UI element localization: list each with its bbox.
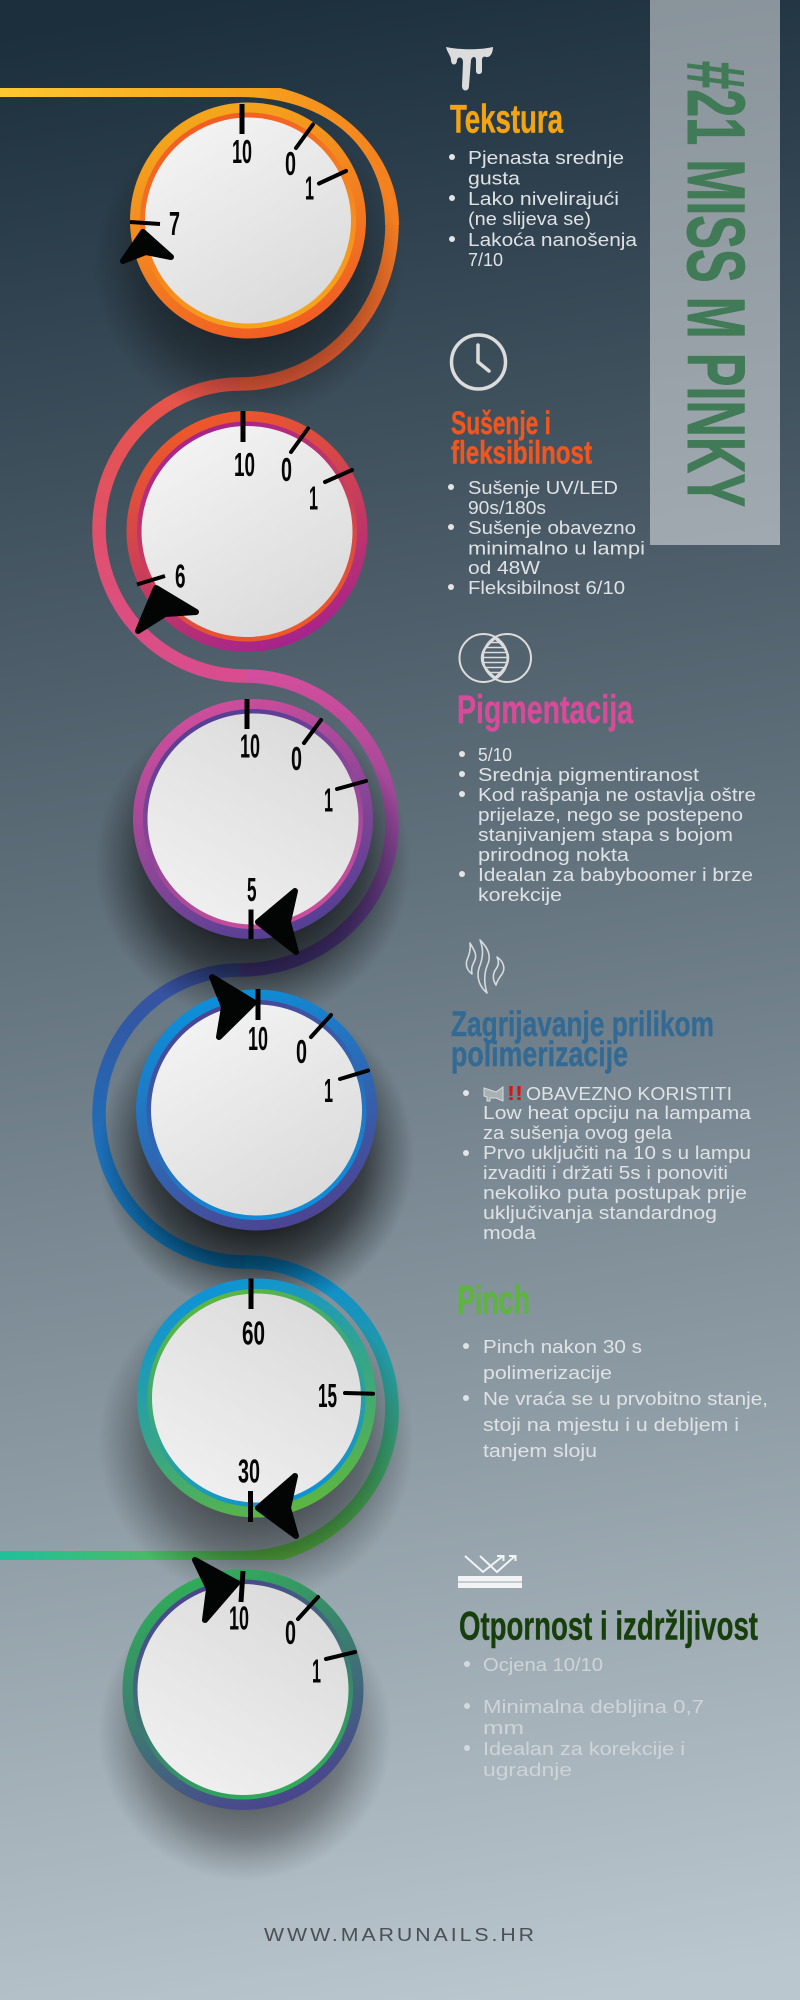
section: pigmentacija: prirodnog nokta	[478, 845, 630, 865]
section: pigmentacija: prijelaze, nego se postepeno	[478, 805, 743, 825]
section: zagrijavanje prilikom polimerizacije: uključivanja standardnog	[483, 1203, 717, 1223]
section: zagrijavanje prilikom polimerizacije: moda	[483, 1223, 537, 1243]
section: zagrijavanje prilikom polimerizacije: !!	[507, 1083, 523, 1105]
dial 1: tekstura	[123, 102, 366, 338]
section: tekstura: Lako nivelirajući	[468, 189, 619, 209]
section: zagrijavanje prilikom polimerizacije	[451, 1005, 752, 1243]
icon: overlapping circles	[460, 634, 531, 682]
section: susenje i fleksibilnost: minimalno u lampi	[468, 538, 645, 558]
dial 1: tekstura: 10	[232, 133, 252, 170]
section: pinch: Ne vraća se u prvobitno stanje,	[483, 1389, 768, 1409]
connector path through all dials	[0, 88, 399, 1560]
dial 6: otpornost: 0	[285, 1614, 296, 1651]
icon: clock	[452, 335, 506, 389]
section: pigmentacija: Pigmentacija	[457, 688, 634, 732]
title banner	[650, 0, 780, 545]
section: tekstura: 7/10	[468, 250, 503, 270]
dial 5: pinch: 30	[238, 1453, 260, 1490]
section: pigmentacija: Kod rašpanja ne ostavlja oštre	[478, 785, 756, 805]
section: susenje i fleksibilnost: Fleksibilnost 6/10	[468, 578, 625, 598]
section: pinch: Pinch	[457, 1278, 530, 1322]
section: otpornost i izdrzljivost: mm	[483, 1718, 524, 1738]
dial 5: pinch: 60	[242, 1315, 265, 1352]
section: pinch	[457, 1278, 768, 1461]
section: susenje i fleksibilnost: Sušenje obavezno	[468, 518, 636, 538]
title banner: #21 MISS M PINKY	[670, 61, 761, 507]
section: zagrijavanje prilikom polimerizacije: za sušenja ovog gela	[483, 1123, 673, 1143]
section: otpornost i izdrzljivost: Ocjena 10/10	[483, 1655, 603, 1675]
section: otpornost i izdrzljivost: Minimalna debljina 0,7	[483, 1697, 704, 1717]
section: pigmentacija: Idealan za babyboomer i brze	[478, 865, 753, 885]
icon: drip	[446, 47, 493, 90]
section: zagrijavanje prilikom polimerizacije: OBAVEZNO KORISTITI	[526, 1084, 732, 1104]
dial 1: tekstura: 0	[285, 145, 296, 182]
section: tekstura: Lakoća nanošenja	[468, 230, 638, 250]
dial 3: pigmentacija: 1	[324, 782, 333, 818]
dial 3: pigmentacija: 10	[240, 728, 260, 764]
section: zagrijavanje prilikom polimerizacije: Zagrijavanje prilikom	[451, 1005, 714, 1044]
section: pigmentacija: stanjivanjem stapa s bojom	[478, 825, 733, 845]
section: susenje i fleksibilnost	[448, 405, 645, 598]
section: pinch: stoji na mjestu i u debljem i	[483, 1415, 739, 1435]
section: tekstura	[449, 98, 638, 270]
dial 2: susenje	[126, 411, 368, 652]
section: zagrijavanje prilikom polimerizacije: nekoliko puta postupak prije	[483, 1183, 747, 1203]
dial 5: pinch	[137, 1278, 376, 1536]
section: otpornost i izdrzljivost: Idealan za korekcije i	[483, 1739, 685, 1759]
dial 4: zagrijavanje	[136, 977, 377, 1230]
section: pigmentacija: korekcije	[478, 885, 562, 905]
dial 4: zagrijavanje: 0	[296, 1033, 307, 1070]
section: pigmentacija: 5/10	[478, 745, 512, 765]
section: zagrijavanje prilikom polimerizacije: izvaditi i držati 5s i ponoviti	[483, 1163, 728, 1183]
section: zagrijavanje prilikom polimerizacije: polimerizacije	[451, 1035, 628, 1074]
section: pigmentacija: Srednja pigmentiranost	[478, 765, 699, 785]
icon: heat waves	[466, 940, 504, 993]
dial 1: tekstura: 1	[305, 170, 314, 206]
section: otpornost i izdrzljivost	[459, 1604, 758, 1780]
dial 2: susenje: 6	[175, 558, 186, 594]
icon: surface with reflected arrows	[458, 1556, 522, 1588]
section: susenje i fleksibilnost: 90s/180s	[468, 498, 546, 518]
footer url: WWW.MARUNAILS.HR	[264, 1925, 537, 1945]
section: pinch: Pinch nakon 30 s	[483, 1337, 642, 1357]
section: susenje i fleksibilnost: od 48W	[468, 558, 540, 578]
section: zagrijavanje prilikom polimerizacije: Low heat opciju na lampama	[483, 1103, 752, 1123]
section: susenje i fleksibilnost: Sušenje UV/LED	[468, 478, 618, 498]
section: tekstura: Pjenasta srednje	[468, 148, 624, 168]
dial 4: zagrijavanje: 1	[324, 1072, 333, 1109]
dial 4: zagrijavanje: 10	[248, 1020, 268, 1057]
section: susenje i fleksibilnost: Sušenje i	[451, 405, 551, 441]
section: susenje i fleksibilnost: fleksibilnost	[451, 434, 592, 470]
section: tekstura: Tekstura	[450, 98, 564, 142]
dial 6: otpornost	[122, 1560, 364, 1810]
section: tekstura: (ne slijeva se)	[468, 209, 591, 229]
section: pigmentacija	[457, 688, 756, 905]
dial shadows	[93, 111, 414, 1881]
section: zagrijavanje prilikom polimerizacije: Prvo uključiti na 10 s u lampu	[483, 1143, 751, 1163]
dial 5: pinch: 15	[318, 1377, 337, 1414]
section: pinch: tanjem sloju	[483, 1441, 597, 1461]
dial 2: susenje: 1	[309, 480, 318, 516]
dial 3: pigmentacija	[133, 699, 373, 952]
dial 2: susenje: 10	[234, 446, 255, 483]
dial 2: susenje: 0	[281, 451, 292, 488]
dial 3: pigmentacija: 0	[291, 740, 302, 777]
dial 6: otpornost: 1	[312, 1653, 321, 1690]
section: otpornost i izdrzljivost: ugradnje	[483, 1760, 572, 1780]
section: pinch: polimerizacije	[483, 1363, 612, 1383]
section: tekstura: gusta	[468, 168, 521, 188]
dial 6: otpornost: 10	[229, 1600, 249, 1637]
dial 1: tekstura: 7	[169, 205, 180, 242]
dial 3: pigmentacija: 5	[247, 871, 256, 908]
